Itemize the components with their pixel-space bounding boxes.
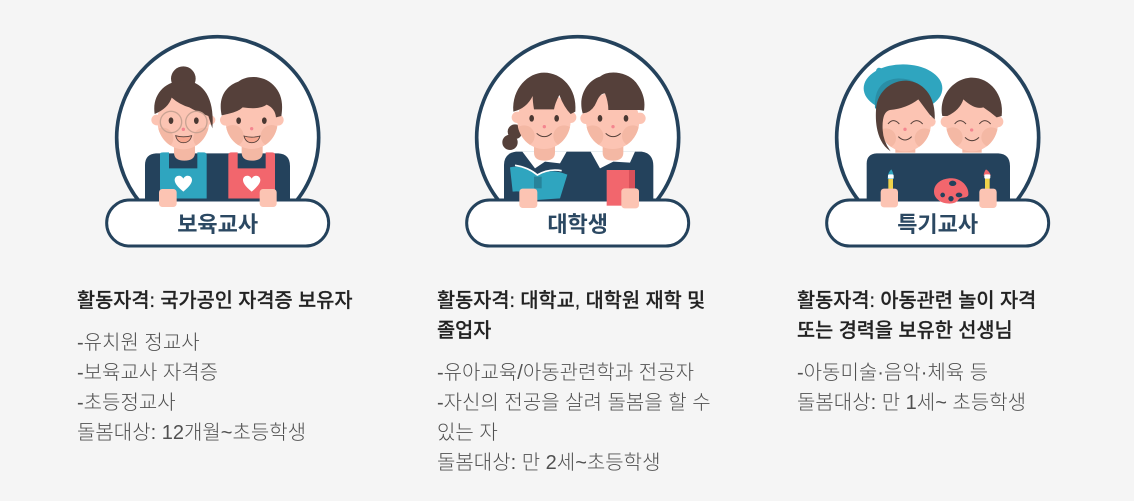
icon: red book [607, 170, 635, 206]
text: column 1 [77, 332, 306, 444]
label pill [107, 200, 329, 246]
necks and collars [522, 152, 567, 168]
text: column 2: 돌봄대상: 만 2세~초등학생 [437, 452, 660, 474]
beret [864, 64, 942, 112]
text: column 1: -초등정교사 [77, 392, 176, 414]
badge: 특기교사 [827, 37, 1049, 246]
heading: column 2 [437, 290, 705, 342]
illustrations [105, 34, 1050, 248]
bodies [145, 153, 290, 203]
ponytail [502, 124, 522, 150]
text: column 1: -보육교사 자격증 [77, 362, 218, 384]
label: 특기교사 [897, 207, 978, 239]
woman head [151, 115, 162, 125]
label: 보육교사 [177, 207, 258, 239]
heading: column 3 [797, 290, 1036, 342]
bodies [867, 153, 1010, 203]
heading: column 2: 졸업자 [437, 320, 491, 342]
text: column 1: 돌봄대상: 12개월~초등학생 [77, 422, 306, 444]
label: 대학생 [547, 207, 608, 239]
text: column 3: 돌봄대상: 만 1세~ 초등학생 [797, 392, 1026, 414]
woman head [926, 117, 936, 127]
text: column 1: -유치원 정교사 [77, 332, 200, 354]
icon: palette [934, 178, 968, 204]
heading: column 1: 활동자격: 국가공인 자격증 보유자 [77, 290, 352, 312]
icon: open book [510, 165, 567, 200]
icon: paint brush left [888, 169, 894, 192]
icon: hearts [175, 176, 192, 192]
necks [895, 142, 915, 153]
label pill [467, 200, 689, 246]
text: column 2 [437, 362, 711, 474]
hands [881, 189, 898, 207]
hands [159, 189, 177, 207]
bodies [504, 152, 653, 203]
text: column 2: 있는 자 [437, 422, 498, 444]
apron: teal [160, 152, 207, 203]
text: column 2: -유아교육/아동관련학과 전공자 [437, 362, 694, 384]
badge: 보육교사 [107, 37, 329, 246]
heading: column 2: 활동자격: 대학교, 대학원 재학 및 [437, 290, 705, 312]
man head [580, 113, 592, 124]
man head [220, 114, 231, 126]
icon: paint brush right [984, 169, 991, 192]
heading: column 3: 또는 경력을 보유한 선생님 [797, 320, 1013, 342]
text: column 3 [797, 362, 1026, 414]
text: column 2: -자신의 전공을 살려 돌봄을 할 수 [437, 392, 711, 414]
woman head [512, 112, 523, 123]
heading: column 3: 활동자격: 아동관련 놀이 자격 [797, 290, 1036, 312]
text: column 3: -아동미술·음악·체육 등 [797, 362, 988, 384]
badge: 대학생 [467, 37, 689, 246]
man head [941, 116, 952, 127]
neck [174, 142, 195, 161]
apron: red [228, 152, 275, 203]
label pill [827, 200, 1049, 246]
hands [519, 189, 537, 208]
